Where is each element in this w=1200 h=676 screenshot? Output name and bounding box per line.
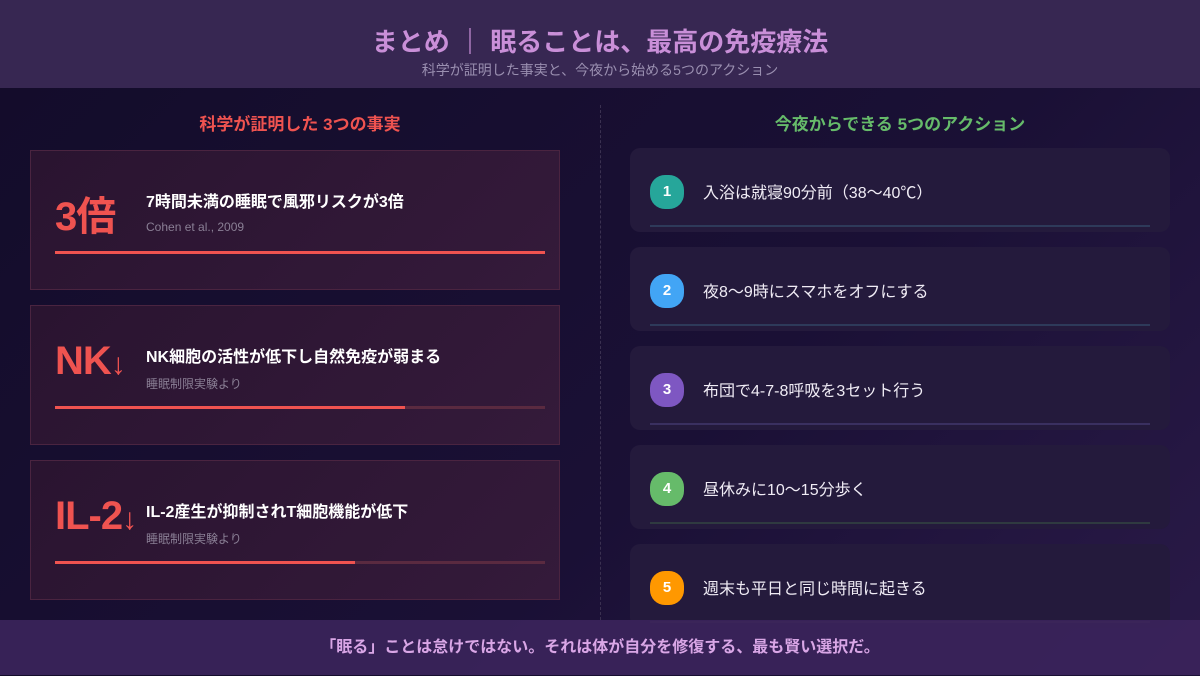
action 3 xyxy=(630,346,1170,430)
action 2 xyxy=(630,247,1170,331)
card: 3x: 3倍 xyxy=(55,195,115,239)
footer xyxy=(0,620,1200,675)
heading: actions: 今夜からできる 5つのアクション xyxy=(775,115,1025,134)
action 3: 3 xyxy=(663,381,671,398)
card: IL-2 xyxy=(30,460,560,600)
action 1: 1 xyxy=(663,183,671,200)
card: NK xyxy=(30,305,560,445)
action 2: 夜8〜9時にスマホをオフにする xyxy=(703,284,928,301)
card: NK: NK細胞の活性が低下し自然免疫が弱まる xyxy=(146,349,441,366)
card: NK: 睡眠制限実験より xyxy=(146,377,242,391)
action 2: 2 xyxy=(663,282,671,299)
card: NK: NK↓ xyxy=(55,339,125,383)
header: まとめ ｜ 眠ることは、最高の免疫療法 xyxy=(372,27,828,57)
action 4 xyxy=(630,445,1170,529)
card: 3x: 7時間未満の睡眠で風邪リスクが3倍 xyxy=(146,194,404,211)
card: 3x xyxy=(30,150,560,290)
action 5 xyxy=(630,544,1170,628)
heading: facts: 科学が証明した 3つの事実 xyxy=(199,115,401,134)
action 1: 入浴は就寝90分前（38〜40℃） xyxy=(703,185,932,202)
action 1 xyxy=(630,148,1170,232)
action 5: 週末も平日と同じ時間に起きる xyxy=(703,581,927,598)
card: IL-2: 睡眠制限実験より xyxy=(146,532,242,546)
footer: 「眠る」ことは怠けではない。それは体が自分を修復する、最も賢い選択だ。 xyxy=(320,639,880,656)
action 5: 5 xyxy=(663,579,671,596)
action 3: 布団で4-7-8呼吸を3セット行う xyxy=(703,383,925,400)
card: 3x: Cohen et al., 2009 xyxy=(146,220,244,234)
header: 科学が証明した事実と、今夜から始める5つのアクション xyxy=(422,62,778,78)
card: IL-2: IL-2産生が抑制されT細胞機能が低下 xyxy=(146,504,408,521)
card: IL-2: IL-2↓ xyxy=(55,494,136,538)
action 4: 昼休みに10〜15分歩く xyxy=(703,482,867,499)
header xyxy=(0,0,1200,88)
divider xyxy=(600,105,601,620)
action 4: 4 xyxy=(663,480,671,497)
